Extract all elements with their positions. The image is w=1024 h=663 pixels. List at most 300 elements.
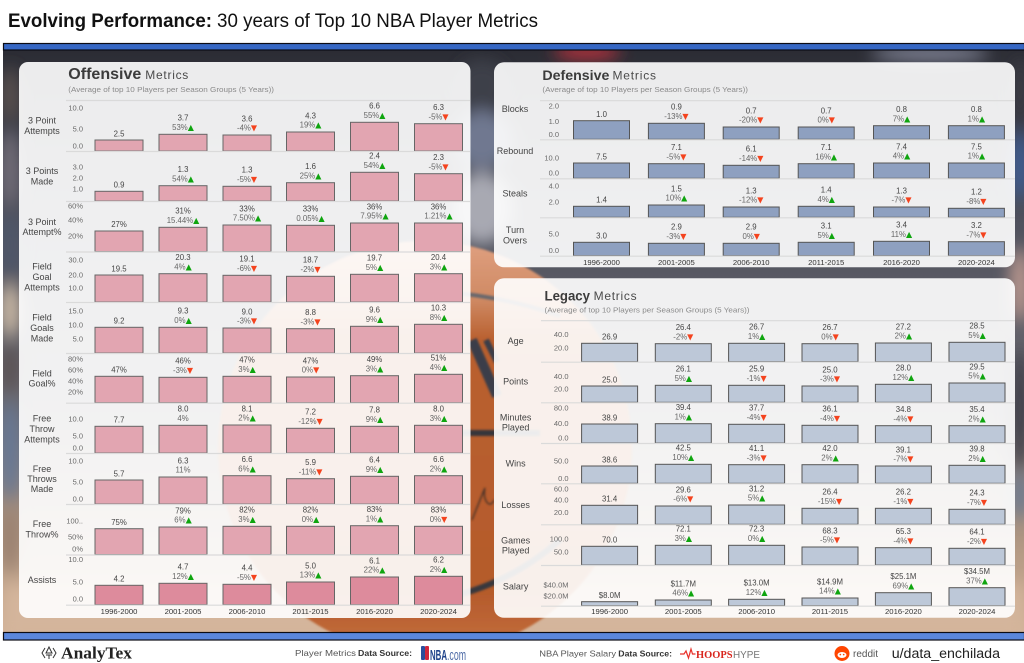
axis: 60% [68, 366, 83, 375]
bars: 5%▲ [748, 494, 766, 503]
row label: Attempts [24, 126, 60, 136]
bars: -4%▼ [747, 413, 767, 422]
heading: defensive metrics: Defensive [542, 68, 610, 84]
bars [95, 202, 462, 252]
bars: 7.95%▲ [360, 212, 389, 221]
row label: Assists [28, 575, 57, 585]
reddit label: reddit [853, 649, 878, 660]
bars: -3%▼ [300, 317, 321, 326]
bars: -2%▼ [967, 537, 988, 546]
bars: 36% [367, 202, 382, 211]
bars [574, 103, 1004, 139]
bars: 8.0 [433, 405, 445, 414]
bars: 2%▲ [895, 332, 913, 341]
row label: Played [502, 423, 529, 433]
x axis labels: legacy: 2006-2010 [738, 607, 775, 616]
icon: AnalyTex logo mark [42, 647, 56, 659]
bars [95, 152, 462, 201]
axis: 5.0 [549, 230, 559, 239]
row label: Made [31, 334, 53, 344]
bars: 4.7 [178, 563, 188, 572]
bars: 12%▲ [893, 373, 915, 382]
bars: 0.7 [821, 106, 832, 115]
bars: -5%▼ [237, 573, 258, 582]
bars: 8%▲ [430, 313, 448, 322]
bars: 31.2 [749, 484, 764, 493]
bars: 65.3 [896, 527, 911, 536]
bars: 6%▲ [238, 464, 257, 473]
row label: Points [503, 377, 529, 387]
bars: 7.5 [596, 152, 608, 161]
bars: 24.3 [969, 489, 985, 498]
bars: -4%▼ [237, 124, 258, 133]
x axis labels: offensive: 2011-2015 [292, 607, 329, 616]
axis: 15.0 [68, 307, 83, 316]
bars: 19.5 [111, 264, 127, 273]
bars: 11% [175, 466, 191, 475]
bars: 7.8 [369, 406, 380, 415]
bars: 7.5 [971, 142, 982, 151]
bars: 5%▲ [675, 374, 693, 383]
x axis labels: defensive: 2020-2024 [958, 258, 996, 267]
bars: 9.0 [242, 307, 253, 316]
bars: -7%▼ [893, 455, 914, 464]
bars: 26.7 [749, 323, 764, 332]
axis: 10.0 [68, 321, 83, 330]
row label: Throws [27, 474, 57, 484]
row: salary [503, 567, 1005, 606]
source: player salary: Data Source: [618, 650, 672, 658]
bars: -12%▼ [298, 417, 324, 426]
bars: 2%▲ [968, 414, 987, 423]
axis: 1.0 [73, 185, 83, 194]
row: age [508, 322, 1005, 362]
bars [574, 142, 1004, 178]
axis: 0.0 [549, 246, 559, 255]
row label: Free [33, 464, 51, 474]
bars: 53%▲ [172, 123, 195, 132]
bars: 9%▲ [366, 415, 384, 424]
row: assists [28, 555, 462, 605]
row: free throws made [27, 455, 462, 504]
bars: 3%▲ [430, 414, 448, 423]
bars [582, 525, 1005, 565]
row: steals [502, 182, 1004, 217]
bars: -5%▼ [237, 175, 258, 184]
row: losses [501, 484, 1005, 524]
bars: 0%▼ [742, 232, 761, 241]
source: player salary [539, 650, 672, 658]
bars: $34.5M [964, 567, 990, 576]
bars: 47% [239, 356, 255, 365]
bars [574, 184, 1004, 217]
row label: Salary [503, 581, 529, 591]
bars: 4% [177, 414, 189, 423]
bars: 6.4 [369, 456, 381, 465]
axis: 0% [72, 545, 83, 554]
bars: 14%▲ [819, 587, 842, 596]
bars: 83% [431, 506, 446, 515]
row label: Field [32, 368, 52, 378]
x axis labels: offensive: 2016-2020 [356, 607, 393, 616]
bars [582, 403, 1005, 443]
bars: 46%▲ [672, 589, 695, 598]
axis: 5.0 [73, 578, 83, 587]
axis: 60% [68, 202, 83, 211]
row label: Free [33, 519, 51, 529]
icon: hoopshype pulse [680, 649, 696, 658]
bars: 82% [303, 506, 318, 515]
bars: -7%▼ [966, 230, 987, 239]
bars: 37%▲ [966, 576, 989, 585]
bars: 26.7 [822, 323, 838, 332]
bars: 1.3 [896, 186, 907, 195]
bars: 46% [175, 357, 191, 366]
axis: 100.. [66, 517, 83, 526]
bars: 4%▲ [817, 195, 836, 204]
bars: 42.5 [676, 444, 692, 453]
row label: Throw [29, 424, 55, 434]
bars: 7.50%▲ [233, 214, 262, 223]
bars: 9.3 [178, 307, 188, 316]
bars: 7.1 [821, 143, 832, 152]
bars: $11.7M [671, 579, 696, 588]
bars: 3.4 [896, 221, 908, 230]
row: free throw attempts [24, 404, 462, 453]
source: player salary: NBA Player Salary [539, 650, 617, 658]
bars: 5%▲ [366, 263, 384, 272]
row: blocks [502, 102, 1004, 139]
bars: -11%▼ [299, 467, 323, 476]
bars: 19.7 [367, 254, 382, 263]
bars: 27.2 [896, 322, 911, 331]
bars: 19%▲ [300, 121, 322, 130]
bars: 38.6 [602, 455, 617, 464]
bars: 64.1 [969, 528, 985, 537]
bars: 6.1 [369, 556, 380, 565]
row label: Age [508, 336, 524, 346]
bars [95, 354, 462, 403]
bars: 7.7 [114, 416, 124, 425]
source: player metrics [295, 649, 412, 658]
bars: $14.9M [817, 577, 843, 586]
bars: 3%▲ [430, 262, 448, 271]
bars: -12%▼ [739, 196, 764, 205]
axis: 40.0 [554, 330, 568, 339]
bars: 3%▲ [238, 365, 257, 374]
bars: 1.21%▲ [424, 212, 453, 221]
bars: -1%▼ [747, 374, 767, 383]
row: 3 point attempts [24, 102, 462, 151]
bars [95, 253, 462, 302]
row: rebound [497, 142, 1004, 178]
heading: legacy metrics [544, 288, 750, 315]
bars: -7%▼ [967, 498, 988, 507]
x axis labels: defensive: 2006-2010 [733, 258, 770, 267]
heading: offensive metrics: (Average of top 10 Players per Season Groups (5 Years)) [68, 85, 275, 94]
axis: 5.0 [73, 432, 83, 441]
axis: 40% [68, 377, 83, 386]
bars: 0.8 [971, 105, 982, 114]
row label: Attempts [24, 283, 60, 293]
bars: 33% [239, 204, 255, 213]
axis: 5.0 [73, 335, 83, 344]
row: 3 point attempt percent [22, 202, 462, 252]
bars: 5%▲ [968, 372, 987, 381]
bars: -6%▼ [673, 495, 694, 504]
x axis labels: offensive: 1996-2000 [101, 607, 137, 616]
bars: 9.6 [369, 306, 380, 315]
bars: 2.9 [671, 223, 682, 232]
heading: legacy metrics: (Average of top 10 Players per Season Groups (5 Years)) [544, 306, 750, 315]
bars: 2%▲ [968, 454, 987, 463]
bars: 41.1 [749, 444, 764, 453]
bars: 26.4 [822, 488, 838, 497]
username: u/data_enchilada [892, 646, 1000, 662]
bars: 1.0 [596, 110, 608, 119]
row label: Goal% [28, 379, 56, 389]
bars: 2%▲ [430, 464, 448, 473]
row: wins [506, 444, 1005, 483]
bars: 31% [175, 207, 191, 216]
bars: 7.2 [305, 408, 316, 417]
row label: Overs [503, 235, 527, 245]
heading: offensive metrics [68, 66, 275, 94]
row label: Goal [32, 272, 52, 282]
bars: -5%▼ [428, 162, 449, 171]
bars: 4%▲ [174, 262, 193, 271]
row label: Attempt% [22, 227, 62, 237]
logo: NBA.com [421, 646, 466, 663]
x axis labels: defensive: 2001-2005 [658, 258, 695, 267]
bars: 54%▲ [172, 174, 195, 183]
bars: -3%▼ [237, 317, 258, 326]
axis: 20% [68, 232, 83, 241]
heading: legacy metrics: Metrics [594, 289, 637, 303]
bars: -14%▼ [739, 154, 764, 163]
bars: 5%▲ [817, 231, 836, 240]
bars: 1.3 [178, 165, 188, 174]
axis: 20.0 [554, 508, 568, 517]
x axis labels: legacy: 2016-2020 [885, 607, 922, 616]
title: 30 years of Top 10 NBA Player Metrics [217, 11, 538, 32]
bars: 72.1 [676, 525, 691, 534]
brand: AnalyTex: AnalyTex [61, 644, 133, 662]
bars: 3.1 [821, 222, 832, 231]
panel: defensive metrics [494, 62, 1015, 267]
bars: 0.9 [114, 181, 124, 190]
heading: legacy metrics: Legacy [544, 288, 590, 304]
axis: 2.0 [549, 197, 559, 206]
bars: -7%▼ [891, 196, 912, 205]
bars: 34.8 [896, 405, 911, 414]
bars: 0.9 [671, 103, 682, 112]
row: field goal percent [28, 354, 462, 403]
x axis labels: legacy: 2011-2015 [812, 607, 848, 616]
axis: 20.0 [68, 270, 83, 279]
bars: 39.4 [676, 403, 692, 412]
bars: 33% [303, 205, 318, 214]
bars: 18.7 [303, 256, 318, 265]
bars: -3%▼ [173, 366, 194, 375]
row label: Rebound [497, 146, 533, 156]
bars [95, 304, 462, 353]
axis: 40.0 [554, 372, 568, 381]
bars: 26.2 [896, 488, 911, 497]
bars: -6%▼ [237, 264, 258, 273]
bars: 69%▲ [893, 581, 915, 590]
bottom blue band [4, 632, 1024, 640]
bars [95, 556, 462, 605]
bars: 68.3 [822, 526, 838, 535]
bars: 3%▲ [675, 534, 693, 543]
title [8, 11, 538, 32]
axis: 3.0 [73, 163, 83, 172]
axis: 2.0 [73, 174, 83, 183]
bars: -5%▼ [428, 112, 449, 121]
bars: 36% [431, 202, 446, 211]
x axis labels: defensive: 1996-2000 [583, 258, 620, 267]
axis: 5.0 [73, 125, 83, 134]
row label: 3 Point [28, 217, 57, 227]
bars [95, 102, 462, 151]
row label: Played [502, 546, 529, 556]
bars: 1%▲ [968, 152, 986, 161]
bars: 5%▲ [968, 331, 987, 340]
bars: 0%▼ [430, 515, 448, 524]
bars: 0.7 [746, 106, 757, 115]
bars: 12%▲ [746, 588, 768, 597]
row: free throw percent [25, 505, 462, 554]
bars: 6.1 [746, 145, 757, 154]
icon: reddit [834, 646, 850, 661]
bars: 51% [431, 354, 446, 363]
bars: -20%▼ [739, 116, 764, 125]
bars: 4%▲ [430, 363, 448, 372]
logo: HoopsHype: HYPE [733, 649, 760, 661]
bars: 38.9 [602, 413, 617, 422]
axis: 10.0 [68, 414, 83, 423]
bars: 3%▲ [238, 515, 257, 524]
x axis labels: defensive [583, 258, 996, 267]
bars: -2%▼ [673, 332, 694, 341]
bars: 39.8 [969, 445, 985, 454]
bars: 28.0 [896, 364, 912, 373]
bars: 4%▲ [893, 152, 911, 161]
axis: 50.0 [554, 456, 568, 465]
x axis labels: offensive: 2020-2024 [420, 607, 458, 616]
axis: 10.0 [544, 153, 559, 162]
bars: 75% [111, 518, 127, 527]
bars: 6.3 [178, 456, 188, 465]
row: field goals made [30, 304, 462, 353]
bars: 7.1 [671, 143, 682, 152]
bars: 2%▲ [821, 453, 840, 462]
bars: 79% [175, 506, 191, 515]
row: turn overs [503, 221, 1004, 256]
bars: -5%▼ [820, 536, 841, 545]
row label: Turn [506, 225, 524, 235]
bars: 15.44%▲ [167, 216, 200, 225]
axis: 1.0 [549, 117, 559, 126]
bars: 2.3 [433, 153, 444, 162]
bars: -3%▼ [666, 232, 687, 241]
bars: 6.6 [433, 455, 444, 464]
bars: 25%▲ [300, 171, 322, 180]
bars: -1%▼ [893, 497, 914, 506]
bars: -4%▼ [893, 536, 914, 545]
row label: Field [32, 313, 52, 323]
bars: 1%▲ [968, 114, 986, 123]
bars: 39.1 [896, 445, 911, 454]
bars: 7.4 [896, 142, 908, 151]
row label: Made [31, 176, 53, 186]
axis: 20% [68, 388, 83, 397]
bars: 0%▲ [174, 316, 193, 325]
x axis labels: legacy: 2020-2024 [959, 607, 996, 616]
row label: Attempts [24, 434, 60, 444]
bars: 9%▲ [366, 465, 384, 474]
bars: 1%▲ [675, 412, 693, 421]
row label: Made [31, 484, 53, 494]
row label: Throw% [25, 530, 59, 540]
axis: 50.0 [554, 547, 568, 556]
axis: 100.0 [550, 534, 568, 543]
panel: legacy metrics [494, 278, 1015, 618]
bars: 0%▲ [302, 515, 320, 524]
axis: 50% [68, 533, 83, 542]
bars: 6.2 [433, 556, 444, 565]
bars: 1%▲ [366, 514, 384, 523]
x axis labels: defensive: 2016-2020 [883, 258, 920, 267]
bars: 37.7 [749, 404, 764, 413]
bars: -3%▼ [820, 375, 841, 384]
x axis labels: offensive: 2006-2010 [229, 607, 265, 616]
bars: -2%▼ [300, 265, 321, 274]
axis: 0.0 [73, 142, 83, 151]
row label: Blocks [502, 104, 529, 114]
bars: 1.5 [671, 184, 682, 193]
bars: 10%▲ [666, 194, 688, 203]
bars: $25.1M [890, 572, 916, 581]
bars [582, 444, 1005, 483]
bars: 26.1 [676, 365, 691, 374]
bars: -4%▼ [893, 414, 914, 423]
bars: 25.9 [749, 365, 764, 374]
panel: offensive metrics [19, 62, 470, 618]
bars: 82% [239, 506, 255, 515]
row label: Minutes [500, 413, 532, 423]
bars [574, 221, 1004, 256]
row label: Goals [30, 323, 54, 333]
bars: 6.6 [242, 455, 252, 464]
bars: 0%▼ [302, 366, 320, 375]
bars: 42.0 [822, 444, 838, 453]
bars: 13%▲ [300, 571, 322, 580]
heading: offensive metrics: Metrics [145, 68, 188, 82]
bars: $8.0M [599, 591, 620, 600]
bars: 10.3 [431, 304, 446, 313]
bars [582, 567, 1005, 606]
axis: 10.0 [68, 284, 83, 293]
bars: 29.5 [969, 362, 985, 371]
bars: 11%▲ [891, 230, 913, 239]
footer [42, 644, 1000, 663]
axis: 80.0 [554, 404, 568, 413]
axis: 0.0 [73, 495, 83, 504]
bars: 2.9 [746, 223, 757, 232]
bars: 25.0 [602, 375, 618, 384]
